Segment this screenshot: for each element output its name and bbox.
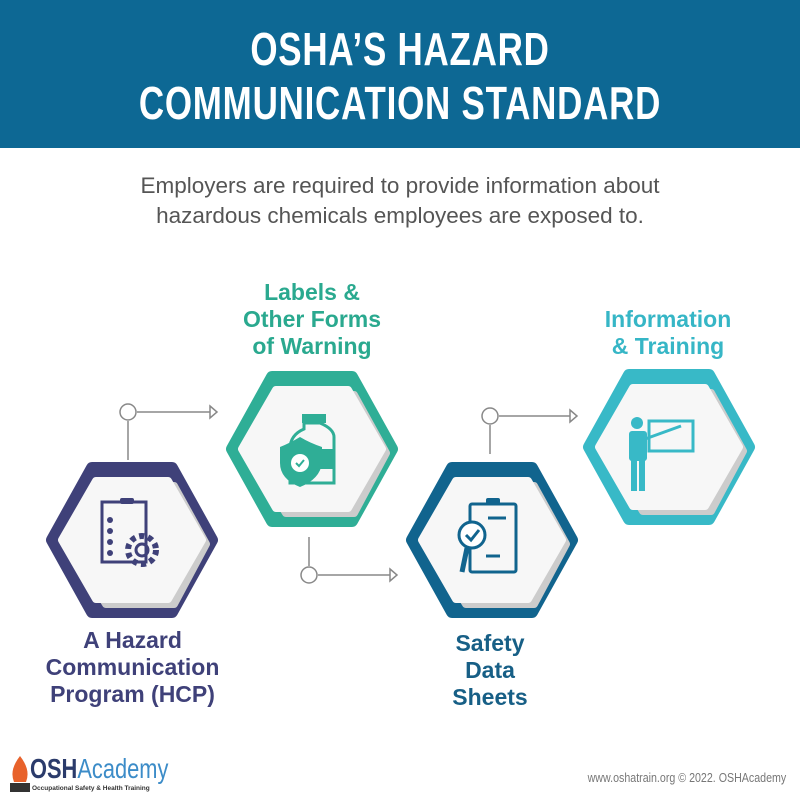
label: sds [452, 630, 528, 710]
label: labels: Labels & [264, 279, 360, 305]
label: labels: Other Forms [243, 306, 381, 332]
label: hcp: Communication [46, 654, 219, 680]
title: OSHA’S HAZARD [250, 23, 550, 75]
hex: hcp [52, 468, 212, 612]
label: labels [243, 279, 381, 359]
connectors [120, 404, 577, 583]
logo [10, 753, 168, 792]
label: info [605, 306, 731, 359]
logo: Occupational Safety & Health Training [32, 785, 150, 792]
hex: info [589, 375, 749, 519]
label: hcp [46, 627, 219, 707]
hex: labels [232, 377, 392, 521]
label: hcp: Program (HCP) [50, 681, 215, 707]
label: sds: Sheets [452, 684, 528, 710]
title: COMMUNICATION STANDARD [139, 77, 661, 129]
title [0, 0, 800, 148]
label: labels: of Warning [252, 333, 372, 359]
footer: www.oshatrain.org © 2022. OSHAcademy [587, 770, 786, 785]
label: info: & Training [612, 333, 724, 359]
label: sds: Safety [455, 630, 525, 656]
subtitle [140, 173, 660, 228]
subtitle: hazardous chemicals employees are exposed to. [156, 203, 644, 228]
hex: sds [412, 468, 572, 612]
subtitle: Employers are required to provide information about [140, 173, 660, 198]
label: info: Information [605, 306, 731, 332]
label: sds: Data [465, 657, 515, 683]
logo: OSHAcademy [30, 753, 168, 784]
label: hcp: A Hazard [83, 627, 182, 653]
